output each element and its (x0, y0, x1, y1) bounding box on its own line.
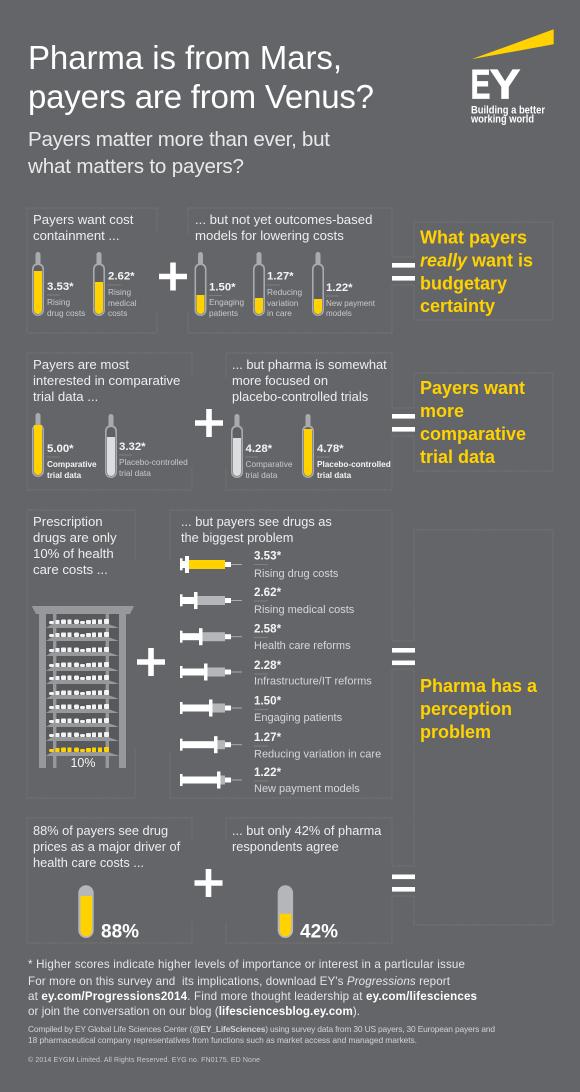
callout: budgetary certainty (392, 222, 553, 320)
footnote text block: * Higher scores indicate higher levels of importance or interest in a particular issue (28, 958, 465, 971)
syringe: rising medical costs 2.62 (180, 586, 355, 616)
compilation note: 18 pharmaceutical company representatives from functions such as market access and managed markets. (28, 1035, 417, 1045)
pill gauge 42% (278, 885, 338, 942)
callout: perception problem: problem (420, 722, 491, 742)
panel: 42 percent of pharma (226, 818, 392, 943)
plus sign 3 (137, 648, 165, 676)
thermometer: comparative trial data 5.00: trial data (47, 471, 82, 480)
syringe: reducing variation 1.27: Reducing variation in care (254, 748, 381, 760)
syringe: new payment models 1.22 (180, 766, 360, 795)
syringe: engaging patients 1.50 (180, 694, 343, 724)
syringe: health care reforms 2.58 (180, 622, 351, 652)
thermometer: new payment models 1.22: models (326, 309, 352, 318)
thermometer: rising medical costs 2.62: 2.62* (108, 270, 135, 282)
thermometer: rising drug costs 3.53 (32, 252, 85, 318)
syringe: infrastructure reforms 2.28: 2.28* (254, 659, 282, 672)
equals sign 2 (392, 414, 415, 432)
footnote text block: or join the conversation on our blog (lifesciencesblog.ey.com). (28, 1005, 360, 1018)
panel: 88 percent of payers: health care costs ... (33, 855, 144, 870)
panel: prescription drugs 10 percent (27, 510, 135, 798)
shelving unit with drugs: 10% (70, 756, 96, 770)
thermometer: comparative 4.28: 4.28* (246, 443, 273, 455)
panel: payers want cost containment: Payers want cost (33, 212, 134, 227)
panel: biggest problem syringes: ... but payers see drugs as (181, 514, 332, 529)
callout: perception problem (392, 530, 553, 925)
panel: prescription drugs 10 percent: drugs are only (33, 530, 117, 545)
panel: not yet outcomes-based models: models for lowering costs (195, 228, 344, 243)
pill gauge 42%: 42% (300, 922, 338, 942)
syringe: rising medical costs 2.62: Rising medical costs (254, 604, 355, 616)
callout: budgetary certainty: budgetary (420, 274, 507, 294)
equals sign 3 (392, 648, 415, 665)
thermometer: reducing variation 1.27: Reducing (267, 287, 302, 297)
callout: budgetary certainty: really want is (420, 250, 533, 270)
panel: 42 percent of pharma: respondents agree (232, 839, 339, 854)
syringe: rising medical costs 2.62: 2.62* (254, 586, 282, 599)
panel: 42 percent of pharma: ... but only 42% of pharma (232, 823, 382, 838)
compilation note (28, 1024, 495, 1045)
pill gauge 88%: 88% (101, 922, 139, 942)
thermometer: reducing variation 1.27: variation (267, 298, 299, 308)
compilation note: Compiled by EY Global Life Sciences Center (@EY_LifeSciences) using survey data from 30 US payers, 30 European payers and (28, 1024, 495, 1034)
syringe: reducing variation 1.27 (180, 731, 381, 760)
panel: prescription drugs 10 percent: 10% of health (33, 546, 114, 561)
panel: biggest problem syringes: the biggest problem (181, 530, 293, 545)
panel: 88 percent of payers: 88% of payers see drug (33, 823, 168, 838)
panel: comparative trial data interest: Payers are most (33, 357, 129, 372)
thermometer: engaging patients 1.50 (194, 252, 244, 318)
panel: not yet outcomes-based models: ... but not yet outcomes-based (195, 212, 372, 227)
subtitle: Payers matter more than ever, but (28, 128, 330, 151)
panel: biggest problem syringes (170, 510, 392, 798)
title: Pharma is from Mars, (28, 39, 342, 76)
syringe: rising drug costs 3.53: Rising drug costs (254, 568, 339, 580)
callout: comparative trial data (392, 373, 553, 471)
panel: pharma placebo-controlled focus: more focused on (232, 373, 328, 388)
subtitle: what matters to payers? (27, 155, 244, 178)
syringe: new payment models 1.22: 1.22* (254, 766, 282, 779)
thermometer: reducing variation 1.27: in care (267, 308, 292, 318)
EY logo (470, 29, 554, 125)
thermometer: comparative 4.28 (231, 414, 293, 480)
thermometer: placebo-controlled 3.32: trial data (119, 468, 151, 478)
thermometer: placebo-controlled 3.32: Placebo-controlled (119, 457, 188, 467)
footnote text block: at ey.com/Progressions2014. Find more thought leadership at ey.com/lifesciences (28, 990, 477, 1003)
thermometer: placebo-controlled 3.32: 3.32* (119, 441, 146, 453)
thermometer: placebo-controlled 4.78: Placebo-controlled (317, 460, 391, 469)
syringe: rising drug costs 3.53: 3.53* (254, 550, 282, 562)
thermometer: reducing variation 1.27 (253, 252, 302, 318)
panel: pharma placebo-controlled focus: placebo-controlled trials (232, 389, 368, 404)
callout: budgetary certainty: certainty (420, 296, 495, 316)
copyright: © 2014 EYGM Limited. All Rights Reserved. EYG no. FN0175. ED None (28, 1056, 260, 1064)
equals sign 4 (392, 874, 415, 892)
footnote text block (28, 958, 477, 1018)
thermometer: comparative trial data 5.00 (32, 413, 97, 480)
thermometer: engaging patients 1.50: Engaging (209, 297, 244, 307)
callout: comparative trial data: comparative (420, 424, 526, 444)
panel: comparative trial data interest: trial data ... (33, 389, 98, 404)
title (28, 39, 374, 115)
EY logo: E (470, 61, 490, 108)
syringe: new payment models 1.22: New payment models (254, 783, 360, 795)
thermometer: reducing variation 1.27: 1.27* (267, 270, 294, 282)
thermometer: new payment models 1.22 (312, 252, 376, 318)
EY logo: Y (490, 61, 520, 108)
callout: comparative trial data: Payers want (420, 378, 525, 398)
thermometer: comparative trial data 5.00: 5.00* (47, 443, 74, 455)
thermometer: comparative trial data 5.00: Comparative (47, 460, 97, 469)
pill gauge 88% (78, 885, 139, 942)
panel: comparative trial data interest (27, 353, 192, 490)
thermometer: comparative 4.28: trial data (246, 470, 278, 480)
panel: prescription drugs 10 percent: Prescription (33, 514, 103, 529)
thermometer: rising drug costs 3.53: Rising (47, 297, 70, 307)
syringe: engaging patients 1.50: Engaging patients (254, 712, 343, 724)
syringe: engaging patients 1.50: 1.50* (254, 694, 282, 708)
thermometer: placebo-controlled 4.78 (302, 414, 391, 480)
EY logo: Building a better (471, 104, 546, 116)
footnote text block: For more on this survey and its implications, download EY's Progressions report (28, 975, 451, 988)
syringe: infrastructure reforms 2.28 (180, 659, 372, 688)
callout: budgetary certainty: What payers (420, 228, 527, 248)
panel: 88 percent of payers: prices as a major driver of (33, 839, 181, 854)
panel: not yet outcomes-based models (188, 208, 392, 333)
thermometer: rising medical costs 2.62: Rising (108, 287, 131, 297)
syringe: infrastructure reforms 2.28: Infrastructure/IT reforms (254, 676, 372, 688)
panel: prescription drugs 10 percent: care costs ... (33, 562, 108, 577)
EY logo: working world (470, 114, 534, 126)
thermometer: engaging patients 1.50: 1.50* (209, 282, 236, 294)
callout: comparative trial data: more (420, 401, 464, 421)
subtitle (27, 128, 330, 178)
thermometer: new payment models 1.22: 1.22* (326, 282, 353, 294)
panel: comparative trial data interest: interested in comparative (33, 373, 180, 388)
thermometer: placebo-controlled 3.32 (105, 414, 188, 478)
thermometer: rising medical costs 2.62: costs (108, 308, 127, 318)
syringe: health care reforms 2.58: Health care reforms (254, 640, 351, 652)
panel: pharma placebo-controlled focus: ... but pharma is somewhat (232, 357, 387, 372)
thermometer: engaging patients 1.50: patients (209, 308, 238, 318)
equals sign 1 (392, 263, 415, 281)
thermometer: new payment models 1.22: New payment (326, 299, 376, 308)
shelving unit with drugs (32, 606, 134, 770)
callout: perception problem: Pharma has a (420, 676, 538, 696)
panel: payers want cost containment (27, 208, 157, 333)
thermometer: placebo-controlled 4.78: trial data (317, 471, 352, 480)
thermometer: comparative 4.28: Comparative (246, 459, 293, 469)
thermometer: rising medical costs 2.62 (93, 252, 137, 318)
plus sign 2 (195, 409, 223, 437)
panel: payers want cost containment: containment ... (33, 228, 120, 243)
panel: 88 percent of payers (27, 818, 192, 943)
syringe: reducing variation 1.27: 1.27* (254, 731, 282, 744)
plus sign 1 (159, 262, 187, 290)
callout: comparative trial data: trial data (420, 447, 496, 467)
panel: pharma placebo-controlled focus (226, 353, 392, 490)
thermometer: rising medical costs 2.62: medical (108, 298, 137, 308)
thermometer: rising drug costs 3.53: 3.53* (47, 281, 74, 293)
title: payers are from Venus? (28, 78, 374, 115)
thermometer: rising drug costs 3.53: drug costs (47, 308, 85, 318)
callout: perception problem: perception (420, 699, 512, 719)
syringe: health care reforms 2.58: 2.58* (254, 622, 282, 636)
thermometer: placebo-controlled 4.78: 4.78* (317, 443, 344, 455)
plus sign 4 (194, 869, 222, 897)
syringe: rising drug costs 3.53 (180, 550, 339, 580)
